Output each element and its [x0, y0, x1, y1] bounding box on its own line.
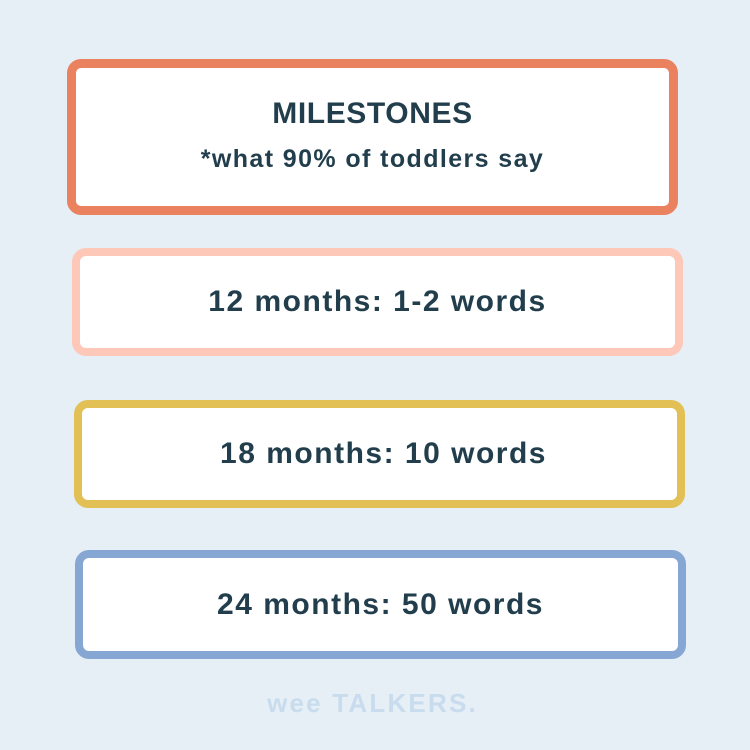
panel: 12 months [72, 248, 683, 356]
subtitle: *what 90% of toddlers say [201, 144, 544, 172]
panel: milestones header [67, 59, 678, 215]
panel: 24 months: 24 months: 50 words [217, 588, 544, 620]
heading: MILESTONES [272, 96, 473, 130]
panel: 12 months: 12 months: 1-2 words [208, 285, 547, 318]
panel: 18 months [74, 400, 685, 508]
logo: wee TALKERS. [267, 688, 478, 718]
panel: 24 months [75, 550, 686, 659]
panel: 18 months: 18 months: 10 words [220, 437, 547, 470]
